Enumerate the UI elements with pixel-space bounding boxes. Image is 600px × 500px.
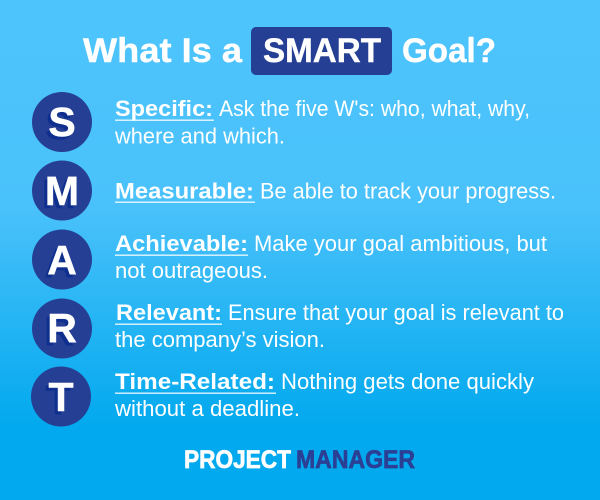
letter badge: T: T [45,377,71,423]
text block: Achievable: Achievable: [115,231,248,256]
text block: Time-Related: Nothing gets done quickly [281,369,534,394]
text block: Measurable [115,178,556,204]
text block: Time-Related: without a deadline. [114,396,300,421]
title badge: SMART: SMART [263,32,381,70]
title: Goal? [402,32,496,70]
text block: Achievable: not outrageous. [115,258,268,283]
title [83,27,496,75]
letter badge: M [32,160,92,220]
text block: Relevant: Ensure that your goal is relevant to [228,300,564,325]
letter badge: R [32,298,92,358]
text block: Achievable [115,231,547,283]
letter badge: M: M [42,171,76,217]
letter badge: S: S [48,99,76,145]
letter badge: T: T [48,374,74,420]
text block: Relevant: the company’s vision. [115,327,325,352]
logo: ProjectManager [184,446,415,474]
letter badge: R: R [44,308,74,354]
letter badge: A: A [44,240,74,286]
text block: Measurable: Be able to track your progress. [260,178,556,204]
title badge: SMART [251,27,392,75]
text block: Time-Related: Time-Related: [115,369,275,394]
text block: Time-Related [114,369,534,421]
logo: ProjectManager: PROJECT [184,446,291,474]
text block: Relevant [115,300,564,352]
letter badge: M: M [45,168,79,214]
text block: Specific: Specific: [115,96,213,121]
text block: Specific: Ask the five W's: who, what, why, [219,96,530,121]
text block: Specific [114,96,530,148]
text block: Specific: where and which. [114,124,285,148]
logo: ProjectManager: MANAGER [296,446,415,474]
letter badge: A: A [47,237,77,283]
letter badge: A [32,230,92,290]
letter badge: T [31,366,91,426]
letter badge: R: R [47,305,77,351]
letter badge: S: S [45,102,73,148]
text block: Measurable: Measurable: [115,178,254,204]
letter badge: S [32,92,92,152]
text block: Achievable: Make your goal ambitious, but [254,231,547,256]
text block: Relevant: Relevant: [116,300,222,325]
title: What Is a [83,32,243,70]
